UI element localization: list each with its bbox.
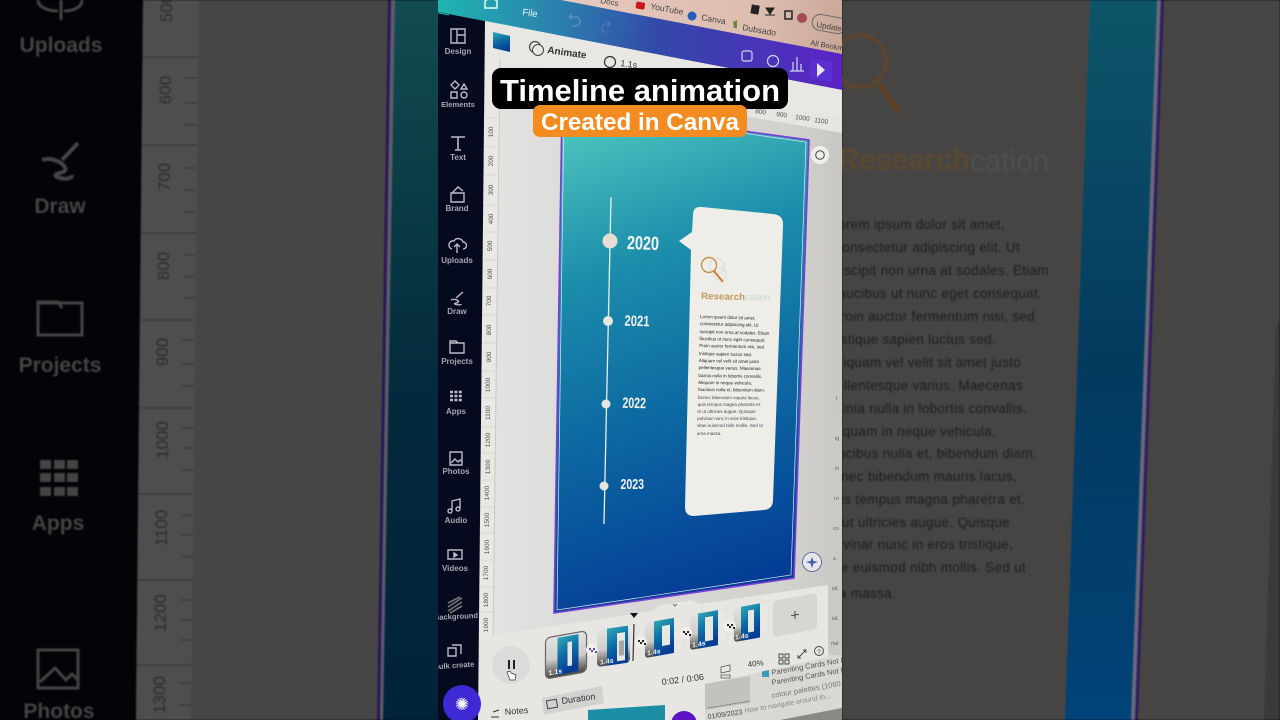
heading suffix: cation (745, 292, 770, 304)
lorem ipsum body: quis tempus magna pharetra et. (698, 402, 761, 407)
panel: central photo of Canva editor (433, 0, 864, 720)
icon: magnifier (702, 258, 726, 282)
left vertical ruler: 1100 (485, 406, 492, 420)
enlarged lorem ipsum text: Aliquam in neque vehicula, (827, 424, 996, 439)
lorem ipsum body: faucibus ut nunc eget consequat. (699, 336, 766, 343)
browser bookmarks bar: Update (816, 20, 843, 34)
enlarged heading: Research (838, 142, 970, 177)
lorem ipsum body: Aliquam in neque vehicula, (698, 380, 752, 386)
notes and duration: Notes (504, 705, 529, 717)
transition markers (586, 620, 736, 656)
panel: dark left sidebar: Bulk create (433, 660, 475, 671)
panel: dark left sidebar: Audio (445, 516, 467, 525)
lorem ipsum body: Aliquam vel velit sit amet justo (699, 358, 760, 364)
editor header: File (522, 7, 538, 20)
file list behind window: t (836, 396, 838, 402)
left sidebar labels and icons: Projects (19, 354, 101, 377)
icon: pause button (492, 646, 530, 684)
left vertical ruler: 1900 (483, 617, 490, 632)
bottom design preview (588, 705, 697, 720)
file list behind window: s. (833, 556, 838, 562)
browser bookmarks bar: Dubsado (742, 22, 777, 38)
lorem ipsum body: urna massa. (697, 431, 722, 436)
panel: dark left sidebar: Videos (442, 564, 469, 573)
left ruler numbers: 600 (156, 76, 175, 104)
timecode: 0:02 / 0:06 (661, 672, 704, 687)
file list behind window: Parenting Cards Not Print R (771, 662, 864, 687)
enlarged lorem ipsum text: tristique sapien luctus sed. (828, 332, 996, 347)
panel: dark left sidebar: Background (434, 611, 479, 622)
enlarged lorem ipsum text: consectetur adipiscing elit. Ut (835, 240, 1020, 255)
left ruler numbers: 1100 (152, 510, 171, 546)
left vertical ruler: 100 (488, 126, 495, 137)
left vertical ruler: 1800 (483, 592, 490, 607)
file list behind window: co (833, 526, 839, 532)
enlarged lorem ipsum text: Aliquam vel velit sit amet justo (831, 355, 1021, 370)
left vertical ruler: 500 (487, 240, 494, 251)
top ruler: 1000 (795, 114, 810, 123)
panel: dark left sidebar: Text (450, 153, 466, 162)
lorem ipsum body: tristique sapien luctus sed. (699, 351, 752, 357)
thumbnail 5: 1.4s (735, 632, 749, 642)
panel: blurred right backdrop (818, 0, 1280, 720)
thumbnail 2: 1.4s (600, 658, 614, 667)
timeline: 2023 (620, 476, 644, 493)
panel: dark left sidebar: Elements (441, 100, 475, 109)
icon: purple magic button (443, 685, 481, 720)
browser bookmarks bar (562, 0, 842, 54)
thumbnail 5 (734, 602, 768, 642)
panel: dark left sidebar: Draw (447, 307, 468, 316)
playhead (630, 613, 638, 661)
panel: dark left sidebar: Design (445, 47, 471, 56)
lorem ipsum body: Donec bibendum mauris lacus, (698, 395, 760, 400)
file list behind window: How to navigate around th... (744, 693, 832, 715)
panel: dark left sidebar: Projects (441, 357, 473, 366)
thumbnail 1 (546, 631, 586, 679)
thumbnails (546, 602, 768, 679)
left vertical ruler: 1600 (484, 539, 491, 554)
left vertical ruler (481, 60, 500, 635)
lorem ipsum body (697, 314, 770, 436)
left vertical ruler: 1300 (485, 459, 492, 474)
left ruler numbers: 700 (155, 163, 174, 191)
left vertical ruler: 1000 (485, 377, 492, 392)
editor header (438, 0, 842, 90)
left vertical ruler: 1200 (485, 432, 492, 447)
panel: dark left sidebar: Photos (442, 467, 470, 476)
file list behind window: Parenting Cards Not Print R (771, 652, 864, 677)
enlarged magnifier icon (834, 35, 910, 112)
chevron (673, 604, 677, 606)
toolbar: 1.1s (620, 58, 638, 70)
lorem ipsum body: Lorem ipsum dolor sit amet, (700, 314, 756, 321)
left sidebar labels and icons: Uploads (20, 34, 102, 57)
thumbnail 4 (690, 608, 727, 650)
title: Timeline animation: Timeline animation (500, 73, 780, 108)
toolbar: Animate (547, 45, 588, 62)
thumbnail 4: 1.4s (692, 640, 706, 650)
file list behind window: colour palettes (1080 x 135 (771, 675, 861, 700)
enlarged lorem ipsum text: faucibus nulla et, bibendum diam. (826, 446, 1037, 461)
thumbnail 2 (597, 625, 630, 667)
icon: comment refresh button (811, 146, 829, 164)
left sidebar labels and icons (19, 0, 102, 720)
thumbnail 3: 1.4s (647, 648, 661, 658)
enlarged lorem ipsum text (818, 217, 1049, 601)
browser bookmarks bar: All Bookmarks (810, 38, 859, 55)
enlarged lorem ipsum text: urna massa. (818, 586, 896, 601)
left sidebar labels and icons: Draw (34, 195, 86, 218)
timeline: 2020 (627, 233, 659, 255)
browser bookmarks bar: Canva (701, 12, 727, 26)
thumbnail 3 (645, 616, 683, 658)
lorem ipsum body: suscipit non urna at sodales. Etiam (700, 329, 770, 336)
add page button (773, 593, 817, 637)
file list behind window: ro (834, 496, 839, 502)
left vertical ruler: 700 (486, 295, 493, 306)
panel: dark left sidebar: Apps (446, 407, 467, 416)
enlarged lorem ipsum text: faucibus ut nunc eget consequat. (834, 286, 1042, 301)
lorem ipsum body: pulvinar nunc in eros tristique, (697, 416, 757, 421)
file list behind window: ial. (832, 586, 840, 592)
file list behind window: ig (835, 436, 839, 442)
icon: magic button (802, 552, 822, 572)
enlarged lorem ipsum text: quis tempus magna pharetra et. (825, 492, 1025, 507)
top ruler: 1100 (814, 117, 829, 126)
left vertical ruler: 200 (488, 155, 495, 166)
top ruler: 800 (755, 108, 767, 117)
enlarged lorem ipsum text: Lorem ipsum dolor sit amet, (830, 217, 1005, 232)
left vertical ruler: 300 (488, 184, 495, 195)
sidebar icons (448, 29, 467, 656)
enlarged lorem ipsum text: Donec bibendum mauris lacus, (823, 469, 1017, 484)
lorem ipsum body: consectetur adipiscing elit. Ut (700, 321, 759, 328)
file list behind window (705, 396, 842, 720)
canvas background (438, 0, 842, 720)
icon: purple magic button: ✺ (455, 695, 469, 714)
lorem ipsum body: vitae euismod nibh mollis. Sed ut (697, 423, 764, 428)
left vertical ruler: 600 (487, 268, 494, 279)
timeline: 2022 (622, 395, 646, 412)
browser bookmarks bar: YouTube (650, 1, 685, 17)
zoom controls: 40% (747, 658, 764, 669)
timeline: 2021 (624, 313, 650, 330)
zoom controls (721, 646, 824, 678)
left vertical ruler: 400 (488, 213, 495, 224)
left ruler numbers: 1000 (153, 421, 172, 459)
enlarged lorem ipsum text: pulvinar nunc in eros tristique, (824, 537, 1013, 552)
panel: timeline controls (478, 585, 828, 720)
left vertical ruler: 1400 (484, 485, 491, 500)
toolbar (485, 21, 842, 118)
file list behind window: in (835, 466, 839, 472)
lorem ipsum body: lacinia nulla in lobortis convallis. (698, 373, 762, 379)
panel: dark left sidebar: Uploads (441, 256, 473, 265)
left ruler numbers: 900 (153, 338, 172, 366)
callout card (679, 207, 783, 516)
enlarged lorem ipsum text: lacinia nulla in lobortis convallis. (825, 401, 1027, 416)
timeline (600, 197, 659, 524)
file list behind window: ial. (832, 616, 840, 622)
left ruler numbers: 800 (154, 252, 173, 280)
left vertical ruler: 1500 (484, 512, 491, 527)
top ruler (746, 108, 842, 133)
research heading: Research (701, 291, 745, 303)
notes and duration: Duration (561, 691, 596, 706)
panel: dark left sidebar (433, 12, 485, 720)
poster: blue gradient timeline design (554, 106, 809, 613)
zoom controls: ? (817, 649, 821, 656)
enlarged heading suffix: cation (970, 143, 1049, 178)
left ruler numbers: 1300 (150, 676, 169, 714)
panel: blurred left backdrop (0, 0, 440, 720)
thumbnail 1: 1.1s (548, 668, 562, 677)
left vertical ruler: 1700 (483, 565, 490, 580)
enlarged lorem ipsum text: Proin auctor fermentum nisi, sed (831, 309, 1035, 324)
lorem ipsum body: pellentesque varius. Maecenas (699, 365, 761, 371)
file list behind window: rial (831, 641, 838, 647)
panel: dark left sidebar: Brand (445, 204, 469, 213)
lorem ipsum body: Proin auctor fermentum nisi, sed (699, 343, 765, 349)
notes and duration (491, 686, 604, 717)
left vertical ruler: 900 (486, 351, 493, 362)
left ruler numbers (137, 0, 198, 714)
top ruler: 900 (776, 111, 788, 120)
left vertical ruler: 800 (486, 324, 493, 335)
enlarged lorem ipsum text: suscipit non urna at sodales. Etiam (829, 263, 1049, 278)
enlarged lorem ipsum text: pellentesque varius. Maecenas (828, 378, 1023, 393)
enlarged lorem ipsum text: In ut ultricies augue. Quisque (826, 515, 1010, 530)
left sidebar labels and icons: Apps (32, 512, 84, 535)
lorem ipsum body: faucibus nulla et, bibendum diam. (698, 387, 765, 393)
left ruler numbers: 1200 (151, 594, 170, 632)
enlarged lorem ipsum text: vitae euismod nibh mollis. Sed ut (819, 560, 1026, 575)
subtitle: Created in Canva: Created in Canva (541, 109, 740, 136)
lorem ipsum body: In ut ultricies augue. Quisque (697, 409, 756, 414)
